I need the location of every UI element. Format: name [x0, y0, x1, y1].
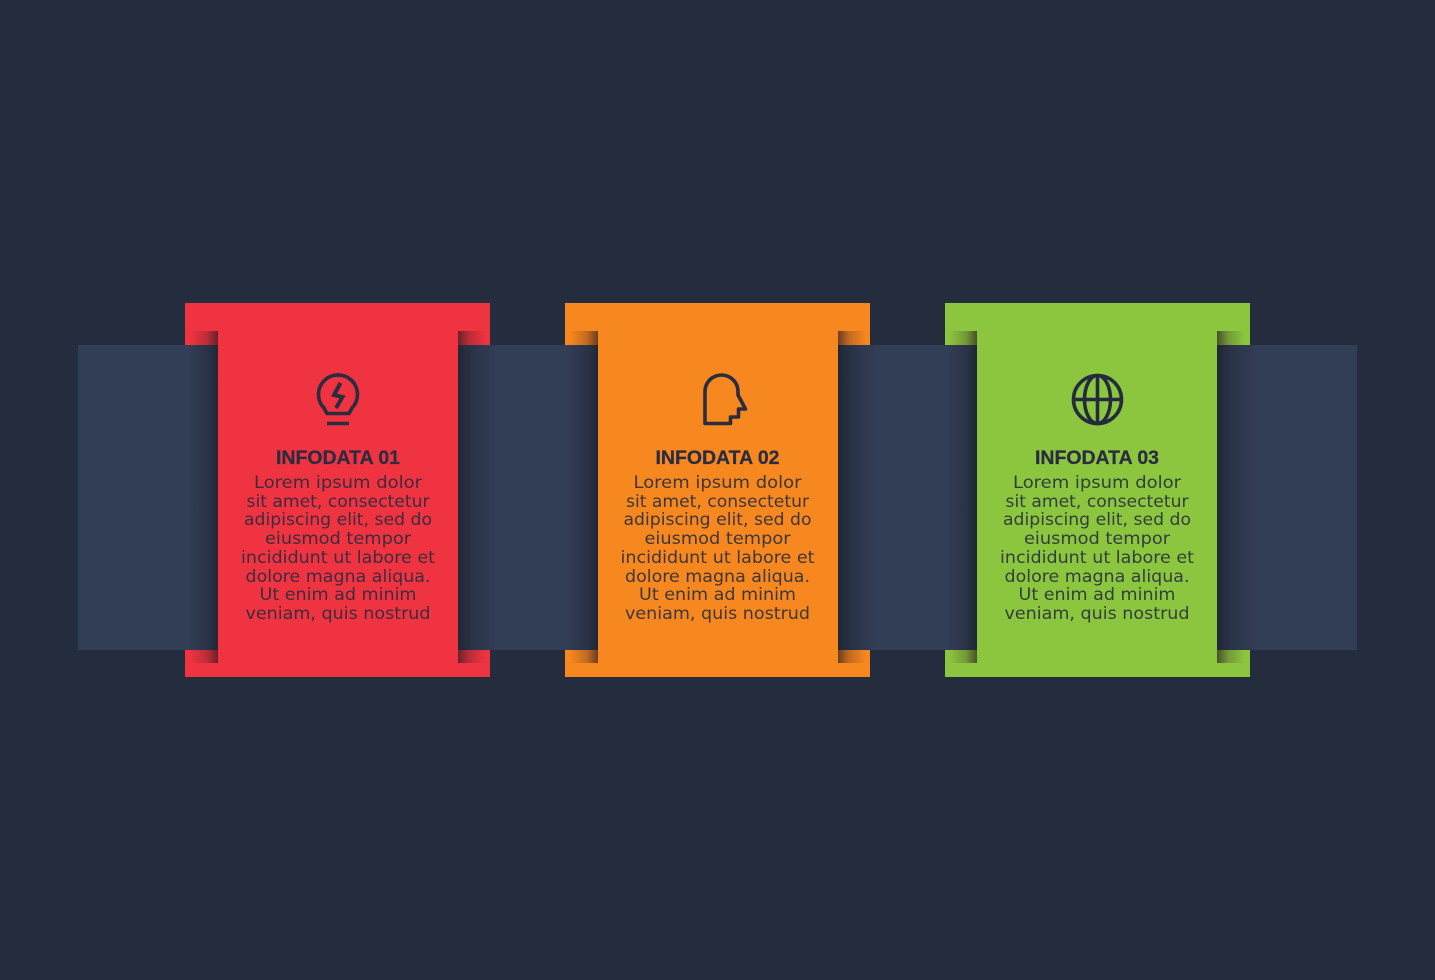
- body text: Lorem ipsum dolor: [254, 473, 422, 492]
- body text: eiusmod tempor: [265, 529, 411, 548]
- body text: sit amet, consectetur: [246, 492, 430, 511]
- body text: [620, 473, 815, 623]
- body text: Lorem ipsum dolor: [1013, 473, 1181, 492]
- green tab shadows: [949, 331, 1245, 663]
- body text: veniam, quis nostrud: [246, 604, 430, 623]
- icon: globe: [1074, 376, 1122, 424]
- body text: sit amet, consectetur: [1006, 492, 1189, 511]
- orange back tab: [565, 303, 870, 677]
- red back tab: [185, 303, 490, 677]
- heading: INFODATA 03: [1035, 447, 1159, 469]
- panel: infodata 01: [185, 303, 496, 677]
- body text: eiusmod tempor: [1024, 529, 1170, 548]
- body text: dolore magna aliqua.: [1004, 567, 1190, 586]
- body text: adipiscing elit, sed do: [624, 510, 812, 529]
- horizontal band: [78, 345, 1357, 650]
- body text: Ut enim ad minim: [1018, 585, 1176, 604]
- body text: Lorem ipsum dolor: [634, 473, 802, 492]
- orange band shadows: [568, 345, 876, 650]
- red front card: [218, 331, 458, 663]
- green front card: [977, 331, 1217, 663]
- body text: incididunt ut labore et: [241, 548, 436, 567]
- body text: eiusmod tempor: [644, 529, 791, 548]
- body text: incididunt ut labore et: [1000, 548, 1195, 567]
- red band shadows: [188, 345, 496, 650]
- body text: veniam, quis nostrud: [1004, 604, 1190, 623]
- orange tab shadows: [570, 331, 866, 663]
- heading: INFODATA 01: [276, 447, 400, 469]
- body text: Ut enim ad minim: [260, 585, 416, 604]
- red tab shadows: [190, 331, 486, 663]
- body text: dolore magna aliqua.: [246, 567, 430, 586]
- body text: [1000, 473, 1195, 623]
- body text: adipiscing elit, sed do: [244, 510, 432, 529]
- body text: [241, 473, 436, 623]
- orange front card: [598, 331, 838, 663]
- heading: INFODATA 02: [656, 447, 780, 469]
- body text: incididunt ut labore et: [620, 548, 815, 567]
- body text: veniam, quis nostrud: [625, 604, 810, 623]
- panel: infodata 02: [565, 303, 876, 677]
- green band shadows: [947, 345, 1255, 650]
- icon: light bulb: [318, 375, 358, 424]
- green back tab: [945, 303, 1250, 677]
- body text: Ut enim ad minim: [639, 585, 796, 604]
- panel: infodata 03: [945, 303, 1255, 677]
- body text: dolore magna aliqua.: [625, 567, 810, 586]
- body text: sit amet, consectetur: [626, 492, 809, 511]
- body text: adipiscing elit, sed do: [1003, 510, 1191, 529]
- icon: head profile: [705, 375, 746, 424]
